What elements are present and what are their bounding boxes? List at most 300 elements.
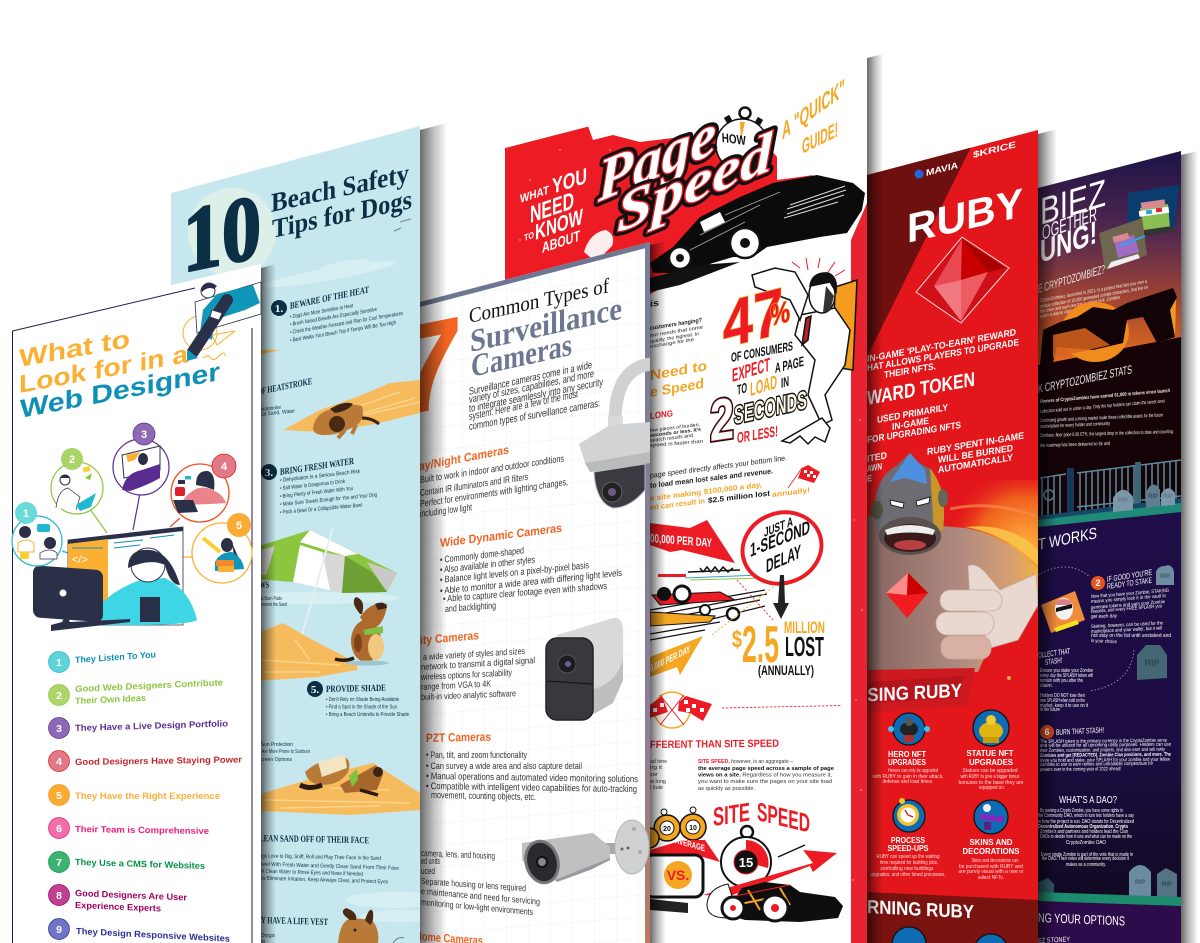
small stopwatches: 20 xyxy=(663,826,671,833)
gorilla hero character xyxy=(867,453,1038,713)
description: HAT ALLOWS PLAYERS TO UPGRADE xyxy=(867,337,1019,374)
intro paragraph: common types of surveillance cameras: xyxy=(469,397,600,433)
section: bullet cameras: uced xyxy=(421,866,435,876)
step 6 burn: zombies to use to earn rarities and untradable compendium for xyxy=(1040,761,1153,768)
numbered circle 3 xyxy=(113,423,169,495)
stopwatch HOW xyxy=(716,108,768,171)
tip 1: • Check the Weather Forecast and Plan for Cool Temperatures xyxy=(290,311,403,336)
card: statue NFT: with RUBY to give a bigger bonus xyxy=(960,774,1020,780)
card: process speed-ups xyxy=(870,798,946,878)
title: Surveillance xyxy=(470,291,622,360)
two seconds or less: SECONDS xyxy=(734,386,807,430)
description: IN-GAME 'PLAY-TO-EARN' REWARD xyxy=(867,327,1016,365)
card: process speed-ups: SPEED-UPS xyxy=(888,843,929,853)
tip 6 partial xyxy=(240,742,310,763)
site speed heading xyxy=(713,796,810,839)
step 2: 2 xyxy=(1095,578,1101,588)
large tombstone: RIP xyxy=(1144,658,1160,668)
tip 3 fresh water: 3. xyxy=(265,467,273,479)
card: skins and decorations xyxy=(958,800,1024,881)
card: process speed-ups: PROCESS xyxy=(891,835,925,845)
list item 5: They Have the Right Experience xyxy=(75,791,220,801)
step 2: generate tokens and earn your Zombie xyxy=(1091,599,1165,611)
section: IP cameras: network to transmit a digital signal xyxy=(421,655,535,672)
list item 8: Good Designers Are User xyxy=(75,888,188,902)
stat: 2.5 million lost: MILLION xyxy=(784,618,825,637)
tip 2 heatstroke: Signs of Heatstroke xyxy=(240,405,281,415)
red header splash xyxy=(505,126,813,294)
partial intro copy: is xyxy=(650,298,659,309)
birds xyxy=(394,219,411,231)
partial intro copy: exchange for the xyxy=(650,337,694,350)
numbered circle 4 xyxy=(171,454,236,522)
step 6 burn: powers over in the coming year of 2022 ahead! xyxy=(1040,766,1121,773)
camera: dome xyxy=(579,364,652,508)
callout: one second delay: JUST A xyxy=(764,514,793,540)
chest ruby xyxy=(886,573,928,618)
list item 1 xyxy=(48,649,156,672)
big number 10: 10 xyxy=(183,175,261,293)
token facts: AUTOMATICALLY xyxy=(938,452,1014,476)
section: PZT cameras: movement, counting objects, etc. xyxy=(431,790,536,803)
step 2: means you simply lock it in the vault to xyxy=(1091,593,1166,605)
section: bullet cameras: ed units xyxy=(421,856,440,866)
list item 1: 1 xyxy=(56,657,62,669)
callout: one second delay xyxy=(732,501,832,595)
list item 7 xyxy=(48,852,205,872)
using ruby heading: USING RUBY xyxy=(855,681,962,707)
section: PZT cameras: • Pan, tilt, and zoom functionality xyxy=(426,750,527,761)
red side strip xyxy=(851,203,867,943)
card: skins and decorations: SKINS AND xyxy=(970,837,1012,847)
section: day night cameras: Day/Night Cameras xyxy=(411,442,509,475)
two seconds or less: OR LESS! xyxy=(737,423,778,447)
card: statue NFT: UPGRADES xyxy=(969,757,1013,767)
graveyard ground: RIP xyxy=(1135,880,1145,886)
illustration: man with pencil xyxy=(183,282,261,361)
header tagline: TO xyxy=(524,230,534,243)
description: THEIR NFTS. xyxy=(884,361,936,381)
numbered circle 5: 5 xyxy=(236,520,242,532)
sand with lying dog xyxy=(240,755,420,815)
token facts: IN-GAME xyxy=(892,416,929,433)
what's a DAO: Every single Zombie is part of the vote that is made in xyxy=(1041,852,1133,858)
panel: Ruby token xyxy=(855,130,1038,943)
intro paragraph: Surveillance cameras come in a wide xyxy=(469,359,592,398)
section: day night cameras: including low light xyxy=(420,502,472,520)
dog in life vest xyxy=(338,908,404,943)
tip 7 clean sand: • Some Dogs Love to Dig, Sniff, Roll and Play Their Face in the Sand xyxy=(240,853,381,862)
logos: $KRICE xyxy=(973,139,1016,160)
callout: one second delay: DELAY xyxy=(766,541,801,578)
tip 1 xyxy=(271,284,403,344)
site speed heading: SITE xyxy=(713,797,750,832)
red speed arrow xyxy=(703,850,837,896)
step 6 burn xyxy=(1040,725,1171,773)
how long copy: few pieces of burden, xyxy=(650,422,700,434)
collect that stash: remain with you after the xyxy=(1040,678,1083,684)
what's a DAO: Zombie's and partners and holders lead the Clan xyxy=(1040,829,1128,835)
graveyard ground xyxy=(1038,865,1181,906)
tip 5 provide shade: • Find a Spot in the Shade of the Sun xyxy=(326,704,397,710)
list item 6: Their Team is Comprehensive xyxy=(75,824,209,836)
icon: ruby diamond xyxy=(916,237,1009,323)
section: PZT cameras: • Manual operations and automated video monitoring solutions xyxy=(426,771,638,785)
zombie silhouette xyxy=(1040,288,1177,365)
step 6 burn: and will be utilized for all upcoming utility purposes. Holders can use xyxy=(1040,742,1171,749)
tip 5 provide shade: 5. xyxy=(311,684,319,696)
title RUBY: RUBY xyxy=(907,179,1023,252)
two seconds or less: 2 xyxy=(710,386,734,454)
title: Look for in a xyxy=(19,340,189,399)
NFT card: orange zombie xyxy=(1041,591,1085,633)
collect that stash: OLLECT THAT xyxy=(1038,647,1070,660)
header tagline xyxy=(520,163,587,257)
arrow: delay down xyxy=(773,575,789,619)
tip 1: • Best Walks Your Beach Trip if Temps Will Be Too High xyxy=(290,320,396,344)
step 2: READY TO STAKE xyxy=(1107,576,1152,591)
panel: What to look for in a web designer xyxy=(0,264,261,943)
step 6 burn: their Zombies, customization, and projects, and also earn and sell rarity xyxy=(1040,747,1165,754)
race cars illustration xyxy=(650,567,773,640)
tip 3 fresh water: • Bring Plenty of Fresh Water With You xyxy=(280,486,353,500)
list item 3: 3 xyxy=(56,723,62,735)
logos xyxy=(914,139,1016,178)
header tagline: KNOW xyxy=(535,204,583,245)
list item 1: They Listen To You xyxy=(75,649,156,665)
card: skins and decorations: select NFTs. xyxy=(978,875,1004,881)
frame lines xyxy=(12,288,252,943)
numbered circle 1 xyxy=(12,502,62,566)
tip 5 provide shade: • Don't Rely on Shade Being Available xyxy=(326,697,399,703)
step 6 burn: The $PLASH token is the primary currency in the CryptoZombie verse xyxy=(1040,738,1167,745)
zombie stats xyxy=(1038,362,1173,449)
section: wide dynamic cameras: Wide Dynamic Cameras xyxy=(440,521,562,550)
card: hero NFT: defense and load times. xyxy=(882,779,934,785)
zombie stats: Owners of CryptoZombiez have earned $1,000 in tokens since launch xyxy=(1040,388,1170,405)
zombie stats: marketplace for every holder and community xyxy=(1040,421,1110,430)
numbered circle 3: 3 xyxy=(141,429,147,441)
section: IP cameras: wireless options for scalability xyxy=(420,667,512,682)
clouds xyxy=(220,256,445,922)
how long copy: speed is faster than xyxy=(650,439,703,449)
two seconds or less: 2 xyxy=(710,386,734,454)
tip 2 heatstroke xyxy=(240,376,312,420)
camera: wireless box xyxy=(546,618,623,720)
what's a DAO: makes as a community. xyxy=(1066,862,1106,868)
section: IP cameras xyxy=(391,628,535,702)
tip 4 partial xyxy=(240,580,287,608)
what's a DAO: Decentralized Autonomous Organization. Crypto xyxy=(1038,824,1128,830)
token facts: ITED xyxy=(867,450,887,465)
graveyard ground: RIP xyxy=(1162,882,1172,888)
tip 3 fresh water: • Dehydration Is a Serious Beach Risk xyxy=(280,469,360,484)
tip 5 provide shade: • Bring a Beach Umbrella to Provide Shade xyxy=(326,712,409,718)
tombstones: RIP xyxy=(1148,494,1158,500)
stopwatch 15: 15 xyxy=(739,855,753,870)
tip 3 fresh water: • Pack a Bowl Or a Collapsible Water Bowl xyxy=(280,503,362,516)
section: bullet cameras: Separate housing or lens required xyxy=(421,876,526,893)
collect that stash: every day the SPLASH token will xyxy=(1040,673,1093,679)
section: wide dynamic cameras: • Commonly dome-shaped xyxy=(440,545,524,566)
stat: 2.5 million lost: 2.5 xyxy=(742,616,779,674)
tip 3 fresh water: • Salt Water Is Dangerous to Drink xyxy=(280,479,345,492)
comparison copy xyxy=(650,759,834,792)
logos: MAVIA xyxy=(926,160,958,178)
step 2: Now that you have your Zombie, STAKING xyxy=(1091,588,1169,600)
tip 4 partial: PAWS xyxy=(253,580,269,590)
section: bullet cameras: camera, lens, and housing xyxy=(421,848,495,861)
collect that stash xyxy=(1038,647,1093,713)
tip 4 partial: Keep Paws Covered the Sand xyxy=(240,602,287,608)
zombie intro text: the chain and each one has a unique look. Zombies xyxy=(1040,295,1120,315)
black hot rod xyxy=(650,175,865,292)
script title Page Speed: Speed xyxy=(617,119,773,245)
section: day night cameras xyxy=(411,442,568,520)
header tagline: WHAT xyxy=(520,183,549,206)
average banner: AVERAGE xyxy=(675,835,705,853)
tip 3 fresh water: • Make Sure Towels Enough for You and Your Dog xyxy=(280,492,377,508)
list of nine qualities xyxy=(48,649,243,943)
collect that stash: own SPLASH when sold on the xyxy=(1040,698,1085,704)
section: wide dynamic cameras: and backlighting xyxy=(445,600,496,615)
header tagline: NEED xyxy=(530,188,574,229)
comparison copy: l bute xyxy=(650,785,663,791)
tip 7 clean sand: • Use Fresh Clean Water to Rinse Eyes and Nose if Needed xyxy=(240,868,363,878)
earning icons xyxy=(892,927,1008,943)
stat: 2.5 million lost: $ xyxy=(732,626,742,653)
section: wide dynamic cameras: • Balance light levels on a pixel-by-pixel basis xyxy=(440,560,589,586)
step 2: not stay on the list until unstaked and xyxy=(1091,633,1171,639)
numbered circle 1: 1 xyxy=(23,508,29,520)
average banner xyxy=(650,835,720,866)
list item 2: 2 xyxy=(56,690,62,702)
how long copy xyxy=(650,408,703,449)
gorilla hand xyxy=(936,565,1038,659)
title: Common Types of xyxy=(469,273,610,328)
card: process speed-ups: time required for building jobs, xyxy=(880,860,938,866)
tip 5 provide shade xyxy=(307,681,409,718)
section: wide dynamic cameras: • Able to capture clear footage even with shadows xyxy=(443,581,607,605)
section: bullet cameras: monitoring or low-light environments xyxy=(421,897,533,917)
token facts: FOR UPGRADING NFTS xyxy=(867,420,961,446)
card: hero NFT: with RUBY to gain in their attack, xyxy=(872,774,944,780)
header tagline: ABOUT xyxy=(542,228,580,257)
tip 5 provide shade: PROVIDE SHADE xyxy=(326,684,386,695)
tip 2 heatstroke: Drink or Eat Sand, Water xyxy=(240,408,295,420)
card: statue NFT xyxy=(958,710,1024,791)
card: skins and decorations: Skins and decorations can xyxy=(972,858,1019,864)
consumers text: IN xyxy=(781,374,789,392)
token facts: USED PRIMARILY xyxy=(877,402,949,426)
large tombstone xyxy=(1137,645,1167,680)
section: PZT cameras: • Compatible with intelligent video capabilities for auto-tracking xyxy=(426,781,637,795)
tombstones: RIP xyxy=(1118,498,1128,504)
reward token heading: WARD TOKEN xyxy=(867,369,975,410)
section: IP cameras: a wide variety of styles and sizes xyxy=(423,646,525,662)
panel: Surveillance cameras xyxy=(391,240,652,943)
what's a DAO xyxy=(1038,794,1134,868)
zombie title xyxy=(1041,180,1106,261)
script title Page Speed: Page xyxy=(597,99,716,216)
tip 7 clean sand xyxy=(240,834,399,885)
title xyxy=(19,325,220,424)
zombie stats: K CRYPTOZOMBIEZ STATS xyxy=(1038,362,1132,396)
card: process speed-ups: controlling new buildings xyxy=(880,866,934,872)
step 2: is your choice xyxy=(1091,638,1117,645)
step 2 xyxy=(1091,565,1174,645)
earning band xyxy=(867,892,1038,943)
token facts: E xyxy=(867,473,872,485)
consumers text: A PAGE xyxy=(775,354,804,377)
list item 8 xyxy=(48,884,188,913)
red arrow: per day: 00,000 PER DAY xyxy=(650,531,712,550)
numbered circle 5 xyxy=(192,513,252,583)
list item 7: 7 xyxy=(56,857,62,869)
zombie title: BIEZ xyxy=(1040,172,1106,234)
tip 6 partial: Pet Sunscreen Options xyxy=(240,757,292,763)
card: statue NFT: equipped on. xyxy=(979,785,1005,791)
section: IP cameras: range from VGA to 4K xyxy=(421,679,491,692)
comparison copy: SITE SPEED, however, is an aggregate – xyxy=(698,759,794,765)
stopwatch HOW: HOW xyxy=(721,130,747,148)
beach umbrella xyxy=(240,527,397,652)
card: process speed-ups: RUBY can speed up the waiting xyxy=(876,854,940,860)
step 6 burn: 6 xyxy=(1044,727,1050,737)
panel: Page Speed xyxy=(505,50,867,943)
list item 4: Good Designers Have Staying Power xyxy=(75,754,243,767)
tip 1: 1. xyxy=(275,303,283,315)
card: skins and decorations: be purchased with RUBY and xyxy=(959,864,1023,870)
card: hero NFT xyxy=(872,713,944,785)
bottom line copy: to load mean lost sales and revenue. xyxy=(650,466,773,490)
script title Page Speed xyxy=(597,99,773,245)
list item 4 xyxy=(48,750,243,772)
list item 9 xyxy=(48,918,230,943)
a quick guide: A "QUICK" xyxy=(782,73,845,145)
section: bullet cameras xyxy=(421,848,540,917)
options heading xyxy=(1038,910,1125,943)
consumers text: LOAD xyxy=(750,371,777,401)
step 6 burn: BURN THAT STASH! xyxy=(1056,726,1104,737)
card: hero NFT: UPGRADES xyxy=(888,757,926,767)
token facts: AWN xyxy=(867,461,882,475)
list item 6 xyxy=(48,818,209,838)
step 6 burn: more you hold and stake, your SPLASH for your zombie and your fellow xyxy=(1040,757,1170,764)
list item 2: Their Own Ideas xyxy=(75,693,146,706)
list item 2 xyxy=(48,677,223,706)
comparison copy: ng it xyxy=(650,765,663,771)
zombie title: OGETHER xyxy=(1042,203,1097,245)
section: day night cameras: Perfect for environments with lighting changes, xyxy=(420,477,568,510)
what's a DAO: the DAO. Their votes will determine every decision it xyxy=(1042,856,1129,862)
consumers text: OF CONSUMERS xyxy=(731,338,793,365)
zombie stats: the roadmap has been delivered so far and xyxy=(1040,441,1110,449)
zombie intro text xyxy=(1038,262,1148,320)
card: hero NFT: HERO NFT xyxy=(888,749,927,759)
bottom line copy: annually! xyxy=(772,485,810,499)
site speed heading: SPEED xyxy=(757,796,810,839)
section: PZT cameras: PZT Cameras xyxy=(426,730,491,745)
tip 8 life vest xyxy=(240,916,328,943)
stopwatch 15 xyxy=(721,826,771,887)
token facts: WILL BE BURNED xyxy=(938,443,1013,466)
list item 2: Good Web Designers Contribute xyxy=(75,677,223,694)
how it works heading: T WORKS xyxy=(1038,524,1097,554)
list item 5 xyxy=(48,784,220,806)
section: IP cameras: Security Cameras xyxy=(391,628,479,650)
stat 47 percent: % xyxy=(770,294,790,333)
comparison copy: or xyxy=(650,772,659,778)
tip 2 heatstroke: OF HEATSTROKE xyxy=(257,376,312,398)
consumers text: EXPECT xyxy=(732,354,770,387)
tombstones xyxy=(1113,484,1175,512)
dark corner wedge xyxy=(867,147,971,357)
stat: 2.5 million lost: (ANNUALLY) xyxy=(758,662,814,678)
partial intro copy xyxy=(650,298,703,350)
section: PZT cameras: • Can survey a wide area and also capture detail xyxy=(426,761,582,772)
title: Beach Safety xyxy=(271,158,409,218)
small stopwatches xyxy=(639,807,706,848)
icon: crossed flags xyxy=(650,692,712,728)
section: wide dynamic cameras xyxy=(440,521,622,615)
zombie intro text: earn tokens daily and xyxy=(1040,306,1082,320)
sun halo xyxy=(188,188,276,276)
what's a DAO: CryptoZombie DAO xyxy=(1066,840,1106,846)
collect that stash: Ensure you stake your Zombie xyxy=(1040,668,1093,674)
section: bullet cameras: e maintenance and need for servicing xyxy=(421,886,540,907)
retro TV with VS: VS. xyxy=(667,867,689,883)
tip 7 clean sand: • This Helps Eliminate Irritation, Keep Airways Clear, and Protect Eyes xyxy=(240,875,388,885)
tip 6 partial: Consider Sun Protection xyxy=(240,742,293,748)
browser window with woman and laptop xyxy=(33,527,197,631)
collect that stash: STASH! xyxy=(1045,656,1062,667)
step 2: marketplace and your wallet, but it will xyxy=(1091,625,1162,635)
tip 7 clean sand: CLEAN SAND OFF OF THEIR FACE xyxy=(254,834,369,846)
intro paragraph: to integrate seamlessly into any security xyxy=(469,376,603,415)
list item 3 xyxy=(48,718,229,738)
camera: bullet xyxy=(521,820,649,886)
tired dog on sand xyxy=(283,380,420,438)
tip 3 fresh water xyxy=(261,456,377,516)
card: statue NFT: Statues can be upgraded xyxy=(962,768,1018,774)
card: process speed-ups: upgrades, and other timed processes. xyxy=(870,872,946,878)
how long copy: seconds or less. It's xyxy=(650,427,701,439)
tip 4 partial: Hot Sand Can Burn Pads xyxy=(240,596,282,602)
collect that stash: claim. xyxy=(1040,683,1053,689)
intro paragraph: system. Here are a few of the most xyxy=(469,388,578,423)
graveyard fence xyxy=(1038,460,1181,527)
list item 3: They Have a Live Design Portfolio xyxy=(75,718,229,733)
section: day night cameras: Built to work in indoor and outdoor conditions xyxy=(420,453,564,486)
heading: need to know: Need to xyxy=(650,357,707,383)
title: Web Designer xyxy=(20,356,220,424)
comparison copy: w long xyxy=(650,779,666,785)
what's a DAO: DAOs to decide how it runs and what can be made on the xyxy=(1040,834,1132,840)
title: Tips for Dogs xyxy=(272,184,412,244)
section: day night cameras: Contain IR illuminators and IR filters xyxy=(420,472,528,499)
bottom line copy: page speed directly affects your bottom line. xyxy=(650,453,787,480)
what's a DAO: the Community DAO, which in turn lets holders have a say xyxy=(1038,813,1134,819)
tip 1: • Brush Nosed Breeds Are Especially Sensitive xyxy=(290,307,377,328)
a quick guide: GUIDE! xyxy=(802,117,838,159)
what's a DAO: By owning a Crypto Zombie, you have some rights in xyxy=(1040,808,1123,814)
header tagline: YOU xyxy=(552,163,587,199)
what's a DAO: in how the project is run. DAO stands for Decentralized xyxy=(1038,819,1134,825)
panel top bar and edge xyxy=(420,240,650,943)
zombie title: UNG! xyxy=(1040,213,1097,270)
description xyxy=(867,327,1019,381)
